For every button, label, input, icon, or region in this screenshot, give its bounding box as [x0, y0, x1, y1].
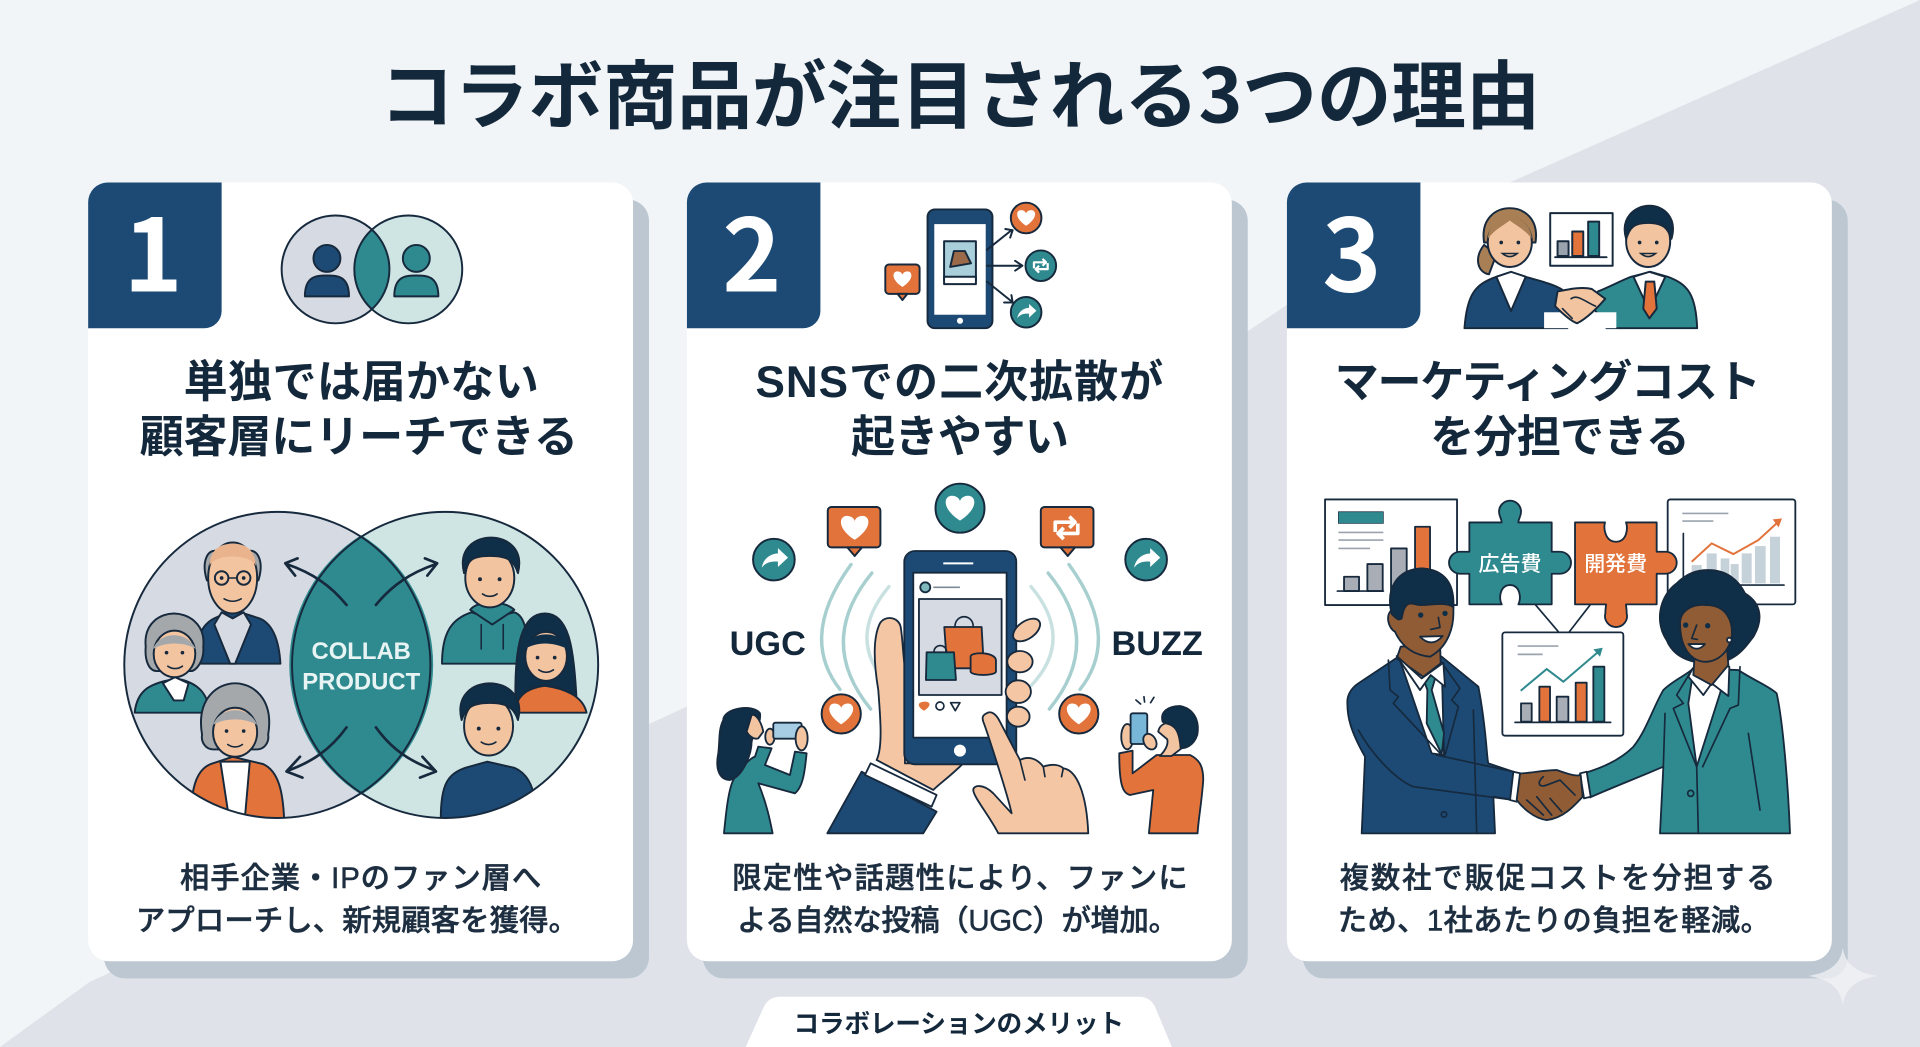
social reaction icons	[753, 484, 1167, 734]
puzzle piece: advertising cost	[1449, 501, 1571, 604]
shared overlap: collab product	[124, 512, 598, 818]
chart right	[1668, 499, 1795, 604]
person checking a phone	[1119, 697, 1203, 833]
title: コラボ商品が注目される3つの理由	[380, 35, 1540, 144]
body text 3: ため、1社あたりの負担を軽減。	[1338, 905, 1770, 938]
body text 2: よる自然な投稿（UGC）が増加。	[737, 905, 1178, 938]
people: younger customers	[441, 538, 587, 818]
puzzle piece: development cost: 開発費	[1584, 553, 1647, 576]
number badge 2: 2	[722, 175, 781, 320]
sparkle mark	[1809, 948, 1877, 1005]
heading 2: SNSでの二次拡散が	[756, 358, 1163, 407]
heading 1: 単独では届かない	[184, 358, 539, 407]
people: older customers	[135, 542, 284, 818]
number badge 3: 3	[1322, 175, 1381, 320]
heading 2: 起きやすい	[851, 413, 1069, 462]
number badge 3	[1287, 175, 1420, 328]
body text 1: 相手企業・IPのファン層へ	[180, 862, 541, 895]
signal waves	[822, 565, 1098, 709]
body text 1	[136, 862, 578, 938]
businessman	[1347, 568, 1521, 833]
label BUZZ: BUZZ	[1111, 625, 1203, 663]
handshake	[1517, 770, 1583, 820]
icon: two partners shaking hands with a chart	[1464, 206, 1697, 328]
footer tab	[746, 997, 1172, 1047]
heading 2	[756, 358, 1163, 462]
icon: overlapping audience circles	[282, 216, 462, 323]
heading 1	[140, 358, 578, 462]
panel: reason 2	[687, 175, 1248, 978]
venn diagram: existing and new customers	[124, 512, 598, 818]
number badge 1: 1	[123, 175, 183, 320]
phone with hands and posting people	[717, 551, 1203, 833]
illustration: UGC and buzz spreading from a phone	[717, 484, 1203, 833]
person taking a photo	[717, 708, 808, 833]
panel: reason 3	[1287, 175, 1848, 978]
puzzle piece: advertising cost: 広告費	[1479, 553, 1542, 576]
heading 3: マーケティングコスト	[1335, 358, 1761, 407]
number badge 2	[687, 175, 820, 328]
label UGC: UGC	[730, 625, 806, 663]
businesswoman	[1580, 570, 1790, 833]
connectors	[1536, 605, 1590, 632]
body text 2: 限定性や話題性により、ファンに	[732, 862, 1188, 895]
arrows outward	[285, 558, 437, 778]
heading 3	[1335, 358, 1761, 462]
body text 1: アプローチし、新規顧客を獲得。	[136, 905, 578, 938]
chart left	[1325, 499, 1457, 605]
body text 3	[1338, 862, 1776, 938]
panel: reason 1	[88, 175, 649, 978]
icon: phone sharing to social reactions	[885, 203, 1056, 328]
footer tab: コラボレーションのメリット	[793, 1009, 1124, 1038]
shared overlap: collab product: PRODUCT	[302, 668, 421, 695]
heading 3: を分担できる	[1430, 413, 1690, 462]
puzzle piece: development cost	[1575, 522, 1677, 627]
shared overlap: collab product: COLLAB	[312, 638, 411, 665]
body text 3: 複数社で販促コストを分担する	[1340, 862, 1776, 895]
body text 2	[732, 862, 1188, 938]
heading 1: 顧客層にリーチできる	[140, 413, 578, 462]
illustration: sharing costs through partnership	[1325, 499, 1795, 833]
number badge 1	[88, 175, 222, 328]
chart center	[1502, 632, 1623, 736]
